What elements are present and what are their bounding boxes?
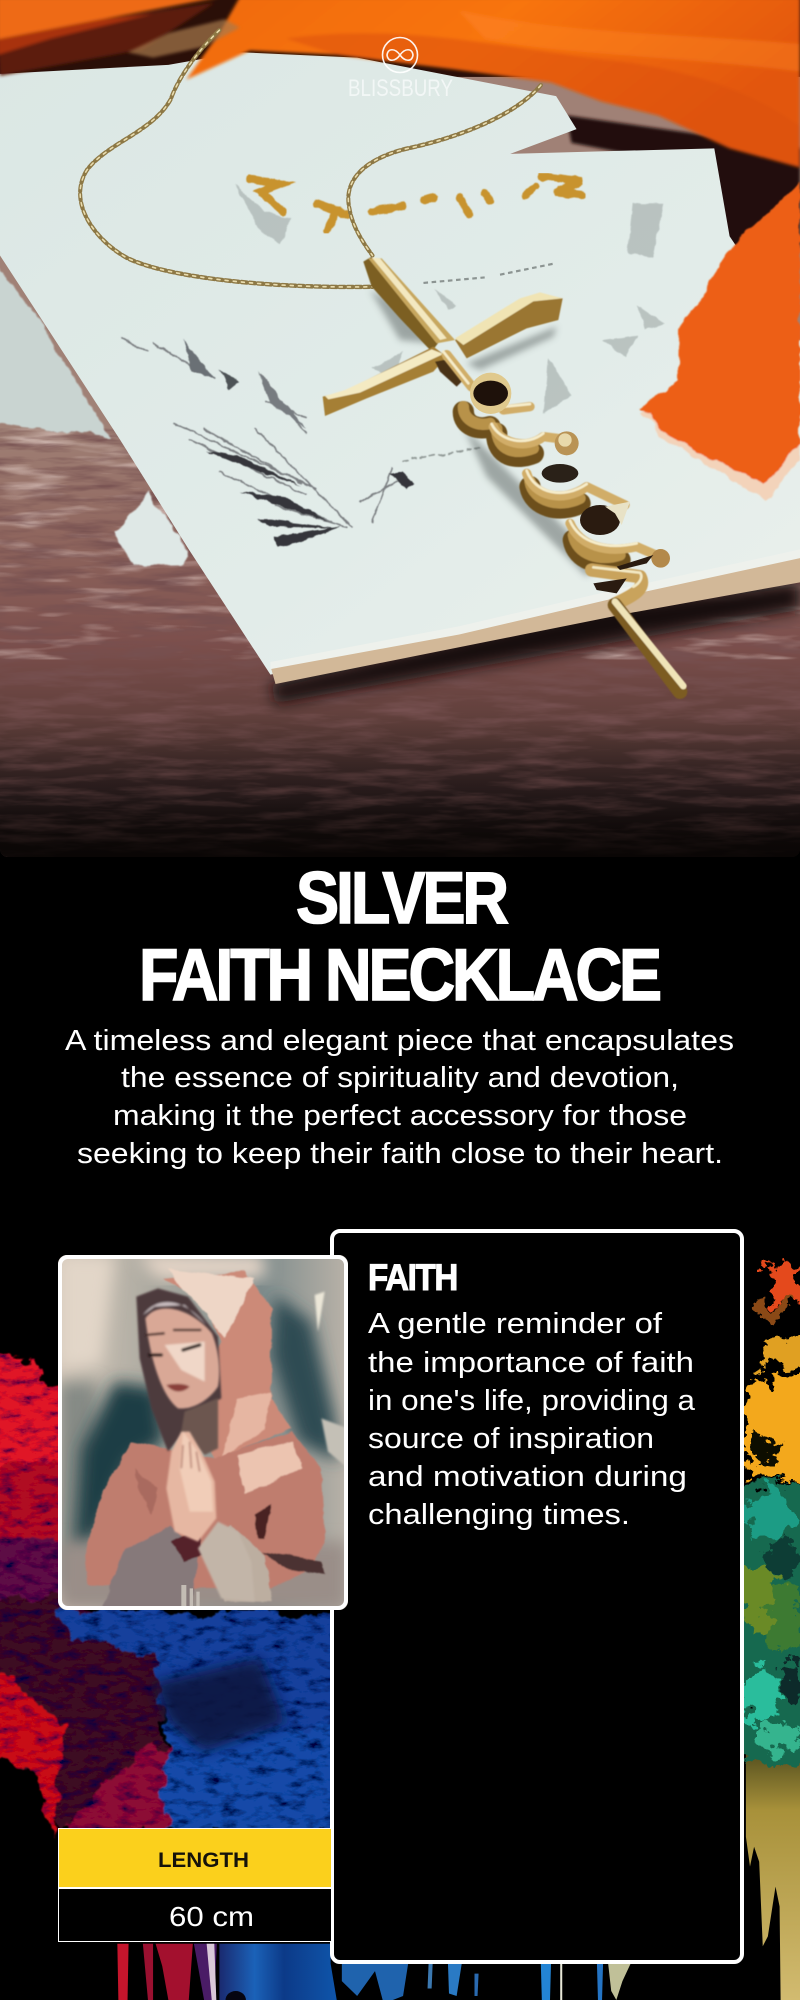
- orange fabric: [0, 0, 800, 168]
- hero photo: necklace on paper: [0, 0, 800, 857]
- pendant hole: [473, 381, 508, 406]
- feature text: [368, 1257, 696, 1531]
- length header: [58, 1828, 331, 1888]
- intro paragraph: seeking to keep their faith close to their heart.: [77, 1138, 723, 1170]
- left paint blob: [0, 1349, 337, 1842]
- length header: LENGTH: [158, 1849, 249, 1872]
- hood: [161, 1268, 291, 1462]
- intro paragraph: A timeless and elegant piece that encapsulates: [65, 1025, 734, 1057]
- pendant hole ring: [470, 373, 511, 414]
- blurred chain top near fabric: [128, 19, 240, 58]
- paper main sheet: [0, 52, 800, 684]
- faint text scribble: [423, 264, 554, 283]
- praying woman portrait: [58, 1255, 348, 1610]
- feature description: in one's life, providing a: [368, 1385, 696, 1417]
- feature description: [368, 1308, 696, 1531]
- paint splash background: [0, 1258, 800, 2000]
- pendant shadow: [370, 290, 600, 577]
- feature description: challenging times.: [368, 1499, 630, 1531]
- dark background behind the paper: [0, 0, 800, 77]
- face: [145, 1308, 219, 1409]
- gold lettering on paper: [250, 176, 582, 231]
- intro paragraph: the essence of spirituality and devotion,: [121, 1062, 679, 1094]
- pendant details: [542, 431, 670, 593]
- brand logo: [348, 36, 453, 102]
- right strip green mottling: [737, 1484, 800, 1762]
- intro paragraph: making it the perfect accessory for those: [113, 1100, 687, 1132]
- intro paragraph: [65, 1025, 734, 1170]
- feature description: the importance of faith: [368, 1347, 694, 1379]
- title: SILVER: [296, 860, 508, 939]
- praying hands: [166, 1432, 216, 1542]
- orange paint patch: [643, 181, 800, 500]
- dark shadow of fabric on right: [566, 115, 800, 258]
- gray washes on paper: [235, 184, 666, 415]
- length table: [58, 1828, 331, 1942]
- wood table: [0, 0, 800, 861]
- sleeve cuff: [198, 1522, 255, 1602]
- dark navy shadow in blue paint: [153, 1658, 286, 1752]
- right strip yellow drips: [746, 1747, 800, 2000]
- pendant script letters: [443, 352, 683, 692]
- pendant cross: [323, 257, 563, 416]
- title: [139, 860, 660, 1010]
- length value: 60 cm: [169, 1901, 254, 1932]
- portrait wash background: [58, 1255, 348, 1610]
- bottom fade: [0, 714, 800, 861]
- feature card: faith: [330, 1229, 744, 1964]
- robe: [85, 1432, 325, 1610]
- lower paper sheet at left: [0, 258, 190, 566]
- feature description: A gentle reminder of: [368, 1308, 663, 1340]
- gray ink sketch strokes: [122, 338, 480, 547]
- length value: [58, 1888, 331, 1942]
- feature description: and motivation during: [368, 1461, 687, 1493]
- cross pendant: [322, 256, 688, 700]
- right paint strip: [737, 1265, 800, 2000]
- necklace chain: [80, 30, 541, 287]
- shadow below paper: [270, 582, 800, 703]
- portrait drip marks: [181, 1585, 200, 1608]
- feature description: source of inspiration: [368, 1423, 654, 1455]
- right strip orange splatter: [746, 1265, 800, 1484]
- logo ring: [382, 38, 418, 72]
- feature heading: FAITH: [368, 1257, 457, 1298]
- veil and neck: [136, 1288, 221, 1455]
- bottom paint drips: [117, 1944, 631, 2000]
- portrait frame: [58, 1255, 348, 1610]
